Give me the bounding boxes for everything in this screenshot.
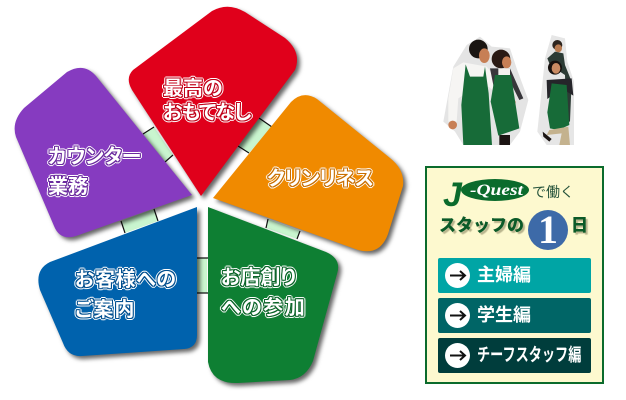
connector: orange to green	[266, 219, 300, 239]
button label: 学生編	[477, 305, 531, 325]
label: お客様へのご案内: お客様への	[75, 269, 177, 291]
label: クリンリネス: クリンリネス	[267, 168, 373, 190]
petal: red	[129, 7, 297, 196]
label: お客様へのご案内: ご案内	[75, 299, 135, 321]
connector: blue to green	[197, 258, 208, 293]
icon: arrow	[445, 263, 470, 288]
connector: red to purple	[143, 127, 173, 162]
heading: 日: 日	[571, 216, 588, 235]
label: 最高のおもてなし	[162, 76, 253, 124]
label: お店創りへの参加	[220, 264, 306, 319]
icon: arrow	[445, 303, 470, 328]
button: 学生編	[438, 298, 591, 333]
person 4	[543, 61, 573, 145]
badge: 1: 1	[538, 207, 558, 252]
label: お店創りへの参加: への参加	[221, 297, 306, 319]
label: カウンター業務	[46, 144, 142, 198]
person 3	[547, 40, 572, 122]
text: で働く: で働く	[532, 184, 574, 200]
petal: blue	[38, 207, 197, 356]
label: 最高のおもてなし: 最高の	[163, 78, 223, 100]
heading: スタッフの: スタッフの	[439, 216, 524, 235]
button: 主婦編	[438, 258, 591, 293]
panel: staff day links	[425, 166, 604, 384]
person 1	[448, 40, 516, 145]
button: チーフスタッフ編	[438, 338, 591, 373]
halo	[443, 37, 528, 145]
petal: orange	[213, 95, 403, 251]
J-Quest logo	[443, 176, 529, 212]
badge: 1	[528, 210, 568, 250]
petal: green	[208, 207, 338, 383]
label: カウンター業務: 業務	[48, 176, 88, 198]
label: 最高のおもてなし: おもてなし	[163, 102, 250, 124]
person 2	[490, 50, 523, 145]
staff photo	[443, 35, 574, 145]
label: お店創りへの参加: お店創り	[221, 267, 296, 289]
button label: チーフスタッフ編	[477, 345, 581, 365]
icon: arrow	[445, 343, 470, 368]
button label: 主婦編	[477, 265, 531, 285]
label: お客様へのご案内	[74, 266, 177, 321]
J-Quest logo: -Quest	[470, 182, 524, 199]
label: カウンター業務: カウンター	[48, 146, 141, 168]
connector: red to orange	[238, 118, 272, 153]
petal: purple	[15, 68, 192, 237]
connector: purple to blue	[121, 209, 158, 233]
